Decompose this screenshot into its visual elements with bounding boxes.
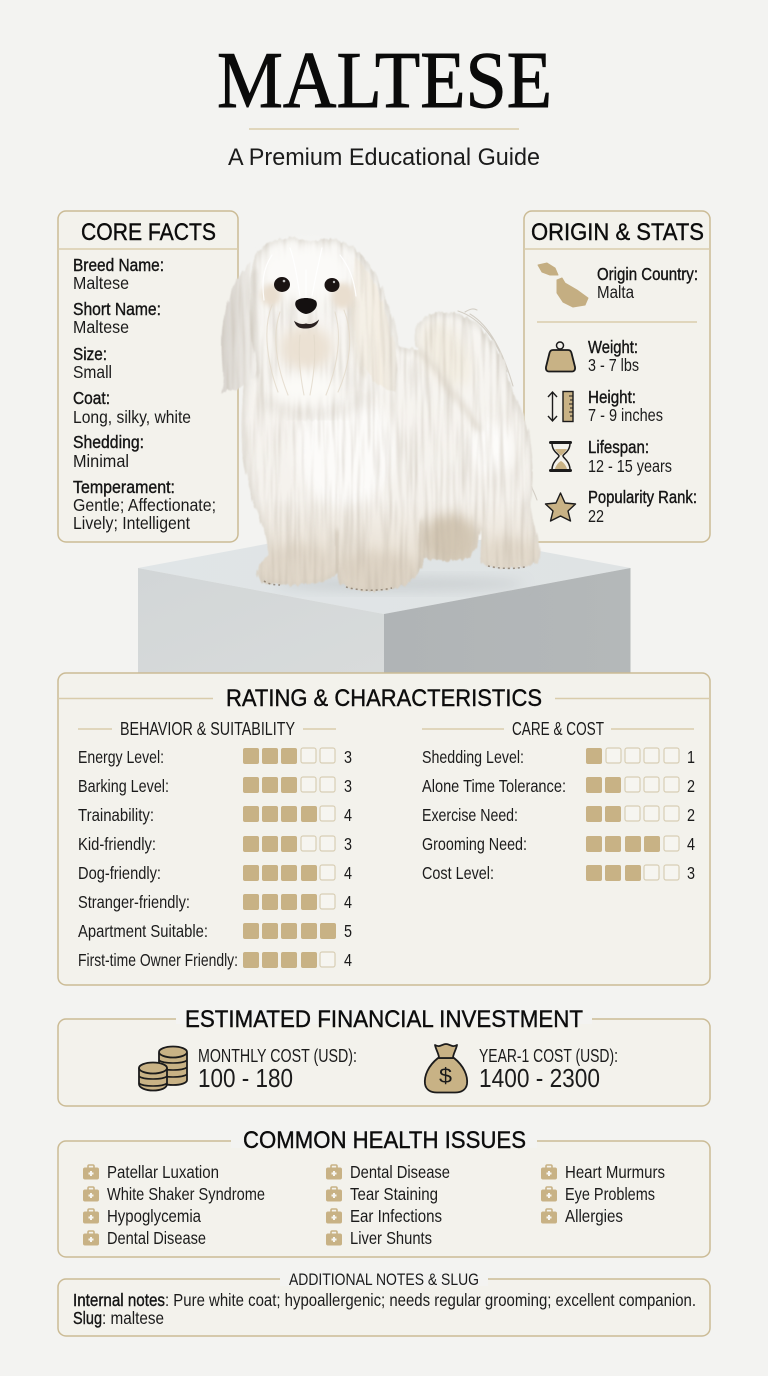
health list: column 1: Hypoglycemia	[107, 1206, 201, 1226]
rating: stranger-friendly	[78, 892, 352, 912]
fact list: Shedding:	[73, 432, 144, 452]
panel: common health issues	[58, 1127, 710, 1257]
rating: shedding level: Shedding Level:	[422, 747, 524, 767]
rating: barking level: Barking Level:	[78, 776, 169, 796]
health list: column 3: Eye Problems	[565, 1184, 655, 1204]
slug text	[73, 1308, 164, 1328]
internal notes text: : Pure white coat; hypoallergenic; needs regular grooming; excellent companion.	[165, 1290, 696, 1310]
rating: trainability	[78, 805, 352, 825]
rating: exercise need: 2	[687, 805, 695, 825]
dog furred coat	[220, 237, 539, 592]
fact list	[73, 255, 216, 533]
health list: column 2	[326, 1162, 450, 1248]
icon: money bag	[425, 1044, 467, 1092]
icon: height ruler	[548, 392, 573, 422]
rating: shedding level	[422, 747, 695, 767]
fact list: Coat:	[73, 388, 110, 408]
fact list: Maltese	[73, 273, 129, 293]
rating: grooming need	[422, 834, 695, 854]
lifespan stat	[588, 437, 672, 476]
lifespan stat: 12 - 15 years	[588, 456, 672, 476]
icon: money bag: $	[439, 1065, 452, 1088]
monthly cost: MONTHLY COST (USD):	[198, 1046, 357, 1066]
panel: additional notes and slug	[58, 1270, 710, 1336]
height stat	[588, 387, 663, 425]
rating: grooming need: Grooming Need:	[422, 834, 527, 854]
health list: column 3: Allergies	[565, 1206, 623, 1226]
origin country	[597, 264, 698, 302]
health list: column 1: White Shaker Syndrome	[107, 1184, 265, 1204]
rating: energy level: Energy Level:	[78, 747, 164, 767]
heading: additional notes and slug: ADDITIONAL NOTES & SLUG	[289, 1270, 479, 1289]
health list: column 3: Heart Murmurs	[565, 1162, 665, 1182]
internal notes text: Internal notes	[73, 1290, 165, 1310]
rating: dog-friendly: Dog-friendly:	[78, 863, 161, 883]
rating: cost level	[422, 863, 695, 883]
lifespan stat: Lifespan:	[588, 437, 649, 457]
origin country: Malta	[597, 282, 634, 302]
column: behavior and suitability	[78, 719, 352, 970]
rating: grooming need: 4	[687, 834, 695, 854]
health list: column 2: Dental Disease	[350, 1162, 450, 1182]
rating: dog-friendly	[78, 863, 352, 883]
fact list: Minimal	[73, 451, 129, 471]
fact list: Small	[73, 362, 112, 382]
year-1 cost: YEAR-1 COST (USD):	[479, 1046, 618, 1066]
heading: origin and stats: ORIGIN & STATS	[531, 219, 704, 246]
subheading: care and cost: CARE & COST	[512, 719, 604, 739]
rating: barking level: 3	[344, 776, 352, 796]
heading: estimated financial investment: ESTIMATED FINANCIAL INVESTMENT	[185, 1006, 583, 1033]
icon: Malta map	[538, 263, 588, 307]
panel: origin and stats	[524, 211, 710, 542]
rating: dog-friendly: 4	[344, 863, 352, 883]
subtitle: A Premium Educational Guide	[228, 144, 540, 171]
fact list: Lively; Intelligent	[73, 513, 190, 533]
popularity stat: 22	[588, 506, 604, 526]
health list: column 1	[83, 1162, 265, 1248]
pedestal	[138, 522, 630, 673]
subheading: behavior and suitability: BEHAVIOR & SUITABILITY	[120, 719, 295, 739]
rating: barking level	[78, 776, 352, 796]
rating: apartment suitable: 5	[344, 921, 352, 941]
weight stat	[588, 337, 639, 375]
health list: column 3	[541, 1162, 665, 1226]
dog nose	[295, 298, 317, 314]
dog body	[241, 237, 539, 592]
column: care and cost	[422, 719, 695, 883]
height stat: Height:	[588, 387, 636, 407]
dog eyes	[274, 277, 340, 292]
rating: kid-friendly: 3	[344, 834, 352, 854]
health list: column 2: Tear Staining	[350, 1184, 438, 1204]
dog paw speckles	[264, 566, 525, 590]
heading: core facts: CORE FACTS	[81, 219, 216, 246]
dog illustration	[220, 237, 539, 592]
rating: trainability: 4	[344, 805, 352, 825]
health list: column 2: Ear Infections	[350, 1206, 442, 1226]
origin country: Origin Country:	[597, 264, 698, 284]
icon: star	[546, 493, 576, 521]
monthly cost: 100 - 180	[198, 1063, 293, 1093]
rating: stranger-friendly: 4	[344, 892, 352, 912]
rating: alone time tolerance: Alone Time Tolerance:	[422, 776, 566, 796]
fact list: Short Name:	[73, 299, 161, 319]
dog wisps behind body	[458, 309, 537, 500]
rating: cost level: 3	[687, 863, 695, 883]
weight stat: 3 - 7 lbs	[588, 355, 639, 375]
rating: cost level: Cost Level:	[422, 863, 494, 883]
rating: alone time tolerance	[422, 776, 695, 796]
rating: shedding level: 1	[687, 747, 695, 767]
heading: rating and characteristics: RATING & CHARACTERISTICS	[226, 685, 542, 712]
slug text: Slug	[73, 1308, 102, 1328]
rating: apartment suitable	[78, 921, 352, 941]
fact list: Maltese	[73, 317, 129, 337]
heading: common health issues: COMMON HEALTH ISSUES	[243, 1127, 526, 1154]
icon: coin stacks	[139, 1046, 187, 1090]
fact list: Gentle; Affectionate;	[73, 495, 216, 515]
monthly cost	[198, 1046, 357, 1093]
panel: core facts	[58, 211, 238, 542]
fact list: Temperament:	[73, 477, 175, 497]
rating: apartment suitable: Apartment Suitable:	[78, 921, 208, 941]
rating: exercise need	[422, 805, 695, 825]
popularity stat	[588, 487, 697, 526]
dog left ear	[220, 262, 257, 393]
rating: first-time owner friendly: 4	[344, 950, 352, 970]
rating: alone time tolerance: 2	[687, 776, 695, 796]
health list: column 2: Liver Shunts	[350, 1228, 432, 1248]
icon: hourglass	[549, 441, 572, 472]
rating: first-time owner friendly: First-time Owner Friendly:	[78, 950, 238, 970]
rating: kid-friendly	[78, 834, 352, 854]
slug text: : maltese	[102, 1308, 164, 1328]
title: MALTESE	[217, 37, 552, 125]
health list: column 1: Dental Disease	[107, 1228, 206, 1248]
rating: exercise need: Exercise Need:	[422, 805, 518, 825]
rating: stranger-friendly: Stranger-friendly:	[78, 892, 190, 912]
year-1 cost: 1400 - 2300	[479, 1063, 600, 1093]
rating: energy level	[78, 747, 352, 767]
panel: estimated financial investment	[58, 1006, 710, 1106]
height stat: 7 - 9 inches	[588, 405, 663, 425]
weight stat: Weight:	[588, 337, 638, 357]
panel: rating and characteristics	[58, 673, 710, 985]
fact list: Size:	[73, 344, 107, 364]
rating: energy level: 3	[344, 747, 352, 767]
dog face	[261, 244, 356, 404]
dog muzzle fur	[267, 305, 350, 395]
dog shading	[241, 237, 539, 592]
popularity stat: Popularity Rank:	[588, 487, 697, 507]
fact list: Breed Name:	[73, 255, 164, 275]
year-1 cost	[479, 1046, 618, 1093]
rating: kid-friendly: Kid-friendly:	[78, 834, 156, 854]
icon: weight	[546, 342, 575, 372]
health list: column 1: Patellar Luxation	[107, 1162, 219, 1182]
fact list: Long, silky, white	[73, 407, 191, 427]
dog mouth	[295, 321, 318, 328]
dog right ear	[352, 255, 398, 393]
rating: trainability: Trainability:	[78, 805, 154, 825]
dog shadow	[275, 577, 525, 591]
